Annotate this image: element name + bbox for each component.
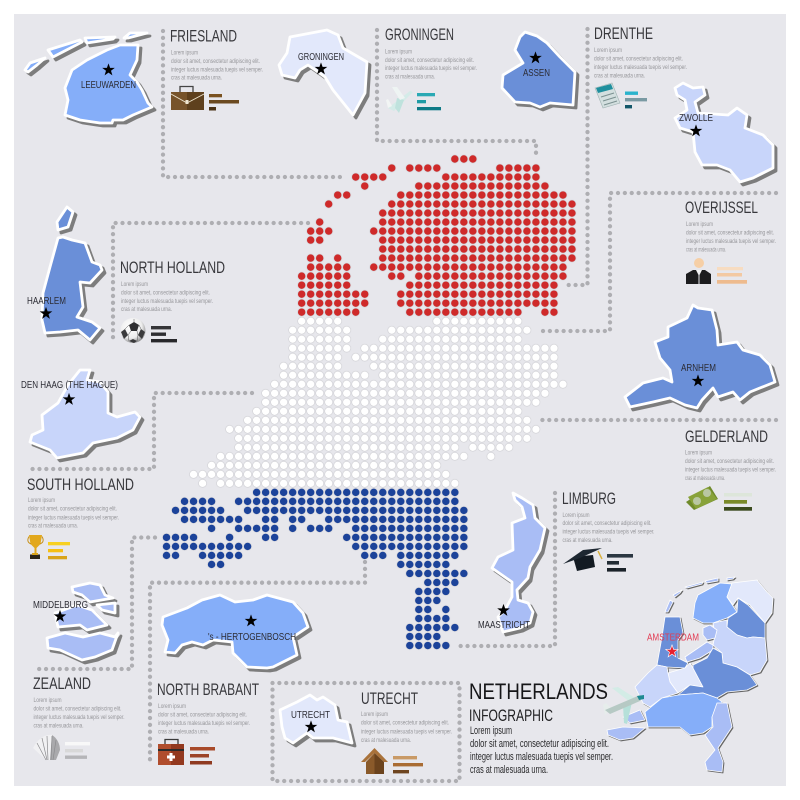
icon: graduation cap (563, 548, 602, 571)
panel: Groningen: GRONINGEN (385, 26, 454, 44)
title block: Netherlands Infographic (469, 679, 613, 776)
icon: house (361, 748, 388, 774)
label: Amsterdam with red star (647, 632, 699, 657)
panel: Friesland: cras at malesuada urna. (171, 74, 222, 82)
panel: Groningen: Lorem ipsum (385, 48, 412, 56)
map: Groningen: GRONINGEN (298, 52, 344, 63)
region: Utrecht (668, 663, 703, 693)
panel: Drenthe: dolor sit amet, consectetur adipiscing elit. (594, 56, 683, 62)
map: Gelderland with Arnhem: ARNHEM (681, 363, 716, 374)
panel: Drenthe: Lorem ipsum (594, 47, 622, 54)
region: Limburg (705, 703, 732, 772)
overview map of the Netherlands (607, 577, 773, 772)
panel: Drenthe (594, 25, 687, 108)
map: Friesland with Leeuwarden (25, 33, 152, 123)
panel: Zealand (33, 675, 125, 760)
bars: Drenthe (625, 92, 647, 108)
icon: banknotes (686, 486, 718, 510)
icon: newspaper (595, 83, 620, 108)
panel: Friesland: integer luctus malesuada tuepis vel semper. (171, 66, 263, 74)
map: Utrecht: UTRECHT (291, 710, 330, 721)
panel: Utrecht: Lorem ipsum (361, 711, 388, 718)
map: Zealand with Middelburg: MIDDELBURG (33, 600, 88, 611)
panel: Utrecht: UTRECHT (361, 690, 418, 708)
region: Groningen (727, 580, 773, 623)
title block: Netherlands Infographic: INFOGRAPHIC (469, 706, 553, 725)
panel: Gelderland: cras at malesuada urna. (685, 475, 725, 482)
bars: South Holland (48, 542, 70, 559)
map: North Holland with Haarlem (27, 207, 102, 340)
region: North Brabant (645, 693, 722, 735)
map: Limburg with Maastricht: MAASTRICHT (478, 620, 530, 631)
panel: North Brabant (157, 681, 259, 765)
panel: Friesland: Lorem ipsum (171, 50, 198, 56)
map: South Holland with Den Haag (21, 370, 140, 458)
panel: Overijssel: dolor sit amet, consectetur adipiscing elit. (686, 230, 774, 236)
bars: Groningen (417, 93, 441, 110)
icon: soccer ball (120, 318, 146, 343)
panel: Drenthe: cras at malesuada urna. (594, 72, 645, 80)
icon: medical case (158, 740, 184, 765)
region: South Holland (635, 665, 678, 707)
panel: North Holland: integer luctus malesuada tuepis vel semper. (121, 298, 213, 305)
map: South Holland with Den Haag: DEN HAAG (THE HAGUE) (21, 380, 118, 391)
panel: Groningen: dolor sit amet, consectetur adipiscing elit. (385, 57, 474, 64)
panel: Zealand: Lorem ipsum (34, 697, 62, 704)
panel: Limburg: integer luctus malesuada tuepis vel semper. (562, 529, 655, 536)
panel: North Holland: Lorem ipsum (121, 281, 148, 288)
icon: large airplane (603, 687, 644, 724)
panel: South Holland (27, 476, 134, 559)
panel: North Brabant: dolor sit amet, consectetur adipiscing elit. (158, 712, 247, 718)
panel: North Brabant: Lorem ipsum (158, 703, 186, 710)
panel: Limburg: LIMBURG (562, 490, 616, 508)
panel: Friesland (170, 28, 263, 110)
region: North Holland (657, 617, 688, 668)
map: Groningen (279, 30, 367, 115)
panel: Utrecht: cras at malesuada urna. (361, 737, 411, 744)
panel: Utrecht (361, 690, 452, 774)
map: Overijssel with Zwolle: ZWOLLE (679, 113, 713, 124)
panel: South Holland: SOUTH HOLLAND (27, 476, 134, 494)
map: Zealand with Middelburg (33, 583, 118, 660)
map: North Holland with Haarlem: HAARLEM (27, 296, 66, 307)
label: Amsterdam with red star: AMSTERDAM (647, 632, 699, 644)
panel: Limburg (562, 490, 655, 572)
panel: Overijssel: cras at malesuada urna. (686, 246, 726, 254)
blue dots: bottom band of the dot map (167, 492, 464, 646)
panel: Zealand: integer luctus malesuada tuepis vel semper. (34, 714, 125, 721)
region: Flevoland (685, 625, 717, 662)
region: Overijssel (713, 620, 767, 675)
panel: Groningen: integer luctus malesuada tuepis vel semper. (385, 65, 477, 72)
icon: trophy (28, 535, 43, 559)
red dots: top band of the dot map (302, 159, 572, 312)
panel: South Holland: dolor sit amet, consectetur adipiscing elit. (28, 506, 117, 513)
panel: Overijssel: OVERIJSSEL (685, 199, 758, 217)
panel: South Holland: integer luctus malesuada tuepis vel semper. (28, 514, 119, 521)
title block: Netherlands Infographic: Lorem ipsum (470, 725, 512, 737)
map: Drenthe with Assen: ASSEN (523, 68, 550, 79)
panel: Gelderland: dolor sit amet, consectetur adipiscing elit. (685, 458, 774, 465)
region: Zealand (607, 710, 645, 740)
panel: Friesland: dolor sit amet, consectetur adipiscing elit. (171, 58, 260, 65)
dot map of the Netherlands in flag colours (167, 159, 572, 646)
panel: Utrecht: dolor sit amet, consectetur adipiscing elit. (361, 720, 449, 727)
panel: North Holland (120, 259, 225, 343)
panel: North Brabant: NORTH BRABANT (157, 681, 259, 699)
panel: South Holland: cras at malesuada urna. (28, 523, 78, 530)
panel: Limburg: dolor sit amet, consectetur adipiscing elit. (562, 520, 652, 527)
bars: Overijssel (717, 267, 747, 284)
panel: Utrecht: integer luctus malesuada tuepis vel semper. (361, 728, 452, 735)
panel: South Holland: Lorem ipsum (28, 497, 55, 504)
panel: Friesland: FRIESLAND (170, 28, 237, 46)
white dots: middle band of the dot map (194, 321, 563, 483)
panel: Gelderland: GELDERLAND (685, 428, 768, 446)
panel: Overijssel (685, 199, 776, 284)
panel: Drenthe: integer luctus malesuada tuepis vel semper. (594, 64, 687, 71)
map: Utrecht (280, 695, 352, 743)
map: Limburg with Maastricht (478, 493, 545, 632)
bars: Utrecht (393, 756, 423, 773)
bars: Limburg (607, 554, 633, 572)
icon: airplane (386, 87, 413, 113)
title block: Netherlands Infographic: NETHERLANDS (469, 679, 608, 704)
panel: Zealand: ZEALAND (33, 675, 91, 693)
region: Gelderland (678, 648, 757, 698)
bars: Gelderland (724, 493, 752, 511)
map: North Brabant with 's-Hertogenbosch (162, 595, 308, 668)
title block: Netherlands Infographic: dolor sit amet, consectetur adipiscing elit. (470, 738, 609, 750)
region: Friesland (693, 583, 737, 623)
icon: briefcase (171, 86, 204, 110)
bars: North Holland (151, 326, 177, 342)
panel: Zealand: dolor sit amet, consectetur adipiscing elit. (34, 706, 122, 713)
bars: North Brabant (190, 747, 215, 764)
bars: Friesland (209, 94, 239, 110)
title block: Netherlands Infographic: integer luctus malesuada tuepis vel semper. (470, 751, 613, 763)
map: Friesland with Leeuwarden: LEEUWARDEN (81, 80, 136, 91)
region: Wadden islands (665, 577, 735, 612)
panel: Zealand: cras at malesuada urna. (34, 723, 84, 730)
panel: Overijssel: Lorem ipsum (686, 221, 713, 228)
panel: Drenthe: DRENTHE (594, 25, 653, 43)
panel: Gelderland: Lorem ipsum (685, 450, 712, 456)
panel: North Brabant: integer luctus malesuada tuepis vel semper. (158, 720, 250, 727)
map: North Brabant with 's-Hertogenbosch: 's - HERTOGENBOSCH (208, 632, 296, 643)
icon: shell (33, 735, 60, 760)
panel: North Holland: NORTH HOLLAND (120, 259, 225, 277)
map: Gelderland with Arnhem (625, 305, 775, 408)
panel: Groningen (385, 26, 477, 113)
panel: Gelderland (685, 428, 776, 511)
icon: businessman (686, 258, 711, 284)
panel: North Brabant: cras at malesuada urna. (158, 729, 209, 736)
panel: North Holland: dolor sit amet, consectetur adipiscing elit. (121, 290, 210, 296)
map: Overijssel with Zwolle (675, 83, 773, 182)
region: Drenthe (727, 598, 765, 638)
panel: North Holland: cras at malesuada urna. (121, 306, 172, 313)
panel: Limburg: cras at malesuada urna. (562, 537, 613, 544)
map: Drenthe with Assen (502, 32, 575, 107)
panel: Limburg: Lorem ipsum (562, 512, 590, 519)
bars: Zealand (65, 742, 90, 759)
title block: Netherlands Infographic: cras at malesuada urna. (470, 764, 548, 776)
panel: Groningen: cras at malesuada urna. (385, 74, 435, 80)
